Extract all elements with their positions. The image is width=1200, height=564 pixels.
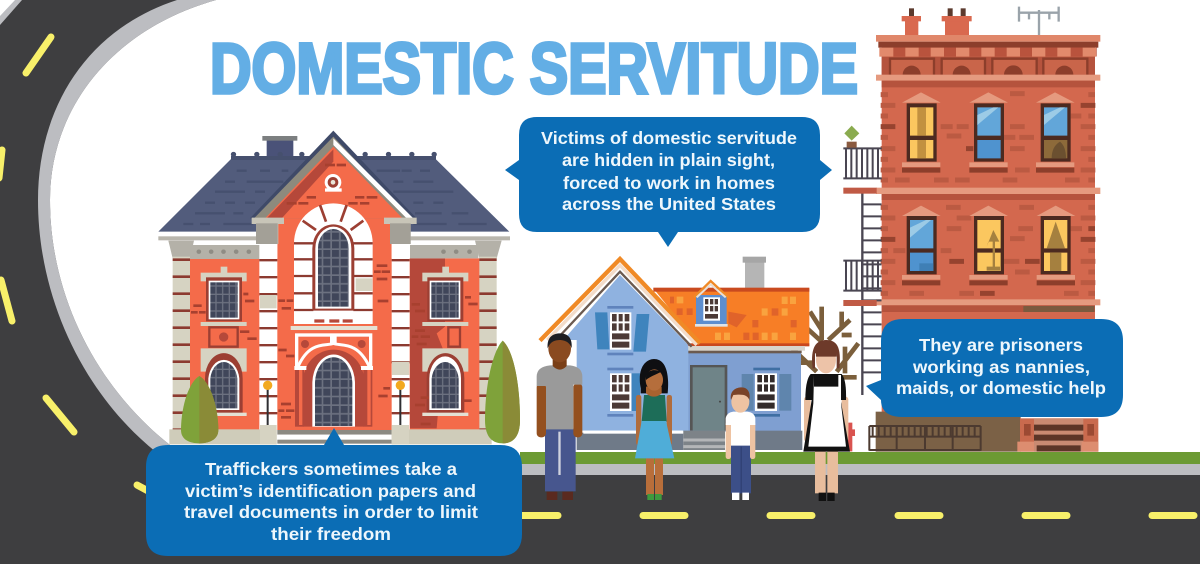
mansion plinth and lamps [169,381,492,444]
callout: hidden in plain sight: are hidden in plain sight, [562,150,775,170]
building: red brick mansion [158,131,520,444]
callout: hidden in plain sight: Victims of domestic servitude [541,128,797,148]
fire escape [843,148,882,395]
fire hydrant [848,423,855,451]
antenna [1019,7,1059,35]
house chimney [743,257,766,299]
callout: hidden in plain sight: across the United States [562,194,776,214]
callout: traffickers: their freedom [271,524,391,544]
mansion roof [158,136,509,232]
callout: prisoners [866,319,1123,417]
apartment basement and stoop [869,412,1098,452]
person: man in grey shirt [537,333,582,500]
person: maid in apron [803,340,850,501]
loose bricks [191,165,478,424]
bare tree [783,307,858,377]
house upper window [595,306,649,355]
house right window [742,368,791,417]
rooftop chimneys [902,8,972,35]
apartment facade [876,35,1100,417]
mansion entrance [277,333,392,444]
person: woman in blue skirt [635,359,674,500]
house rear wing [668,346,805,432]
callout: traffickers: travel documents in order to limit [184,502,478,522]
title: DOMESTIC SERVITUDE [210,30,858,109]
mansion walls [158,232,510,430]
dormer [694,281,728,327]
callout: prisoners: maids, or domestic help [896,378,1106,398]
apartment windows [902,92,1075,285]
callout: prisoners: They are prisoners [919,335,1083,355]
callout: traffickers: victim’s identification papers and [185,481,476,501]
callout: hidden in plain sight: forced to work in homes [563,173,775,193]
potted plant [844,126,859,148]
house door [690,365,727,431]
house roof [653,288,809,346]
building: brick apartment [843,7,1100,452]
callout: hidden in plain sight [505,117,832,247]
house main gable [540,259,700,431]
right shrub [485,341,520,443]
house foundation and steps [577,431,802,450]
house lower window [607,368,640,417]
facade bricks [881,94,1095,293]
person: boy in white shirt [726,387,755,500]
callout: traffickers: Traffickers sometimes take a [205,459,457,479]
grass and sidewalk [520,452,1200,475]
arched central window [291,203,377,330]
side windows [201,267,468,416]
callout: traffickers [146,428,522,556]
building: blue suburban house [537,257,858,501]
left shrub [181,376,218,443]
callout: prisoners: working as nannies, [912,357,1090,377]
central gable and bay [250,131,417,430]
